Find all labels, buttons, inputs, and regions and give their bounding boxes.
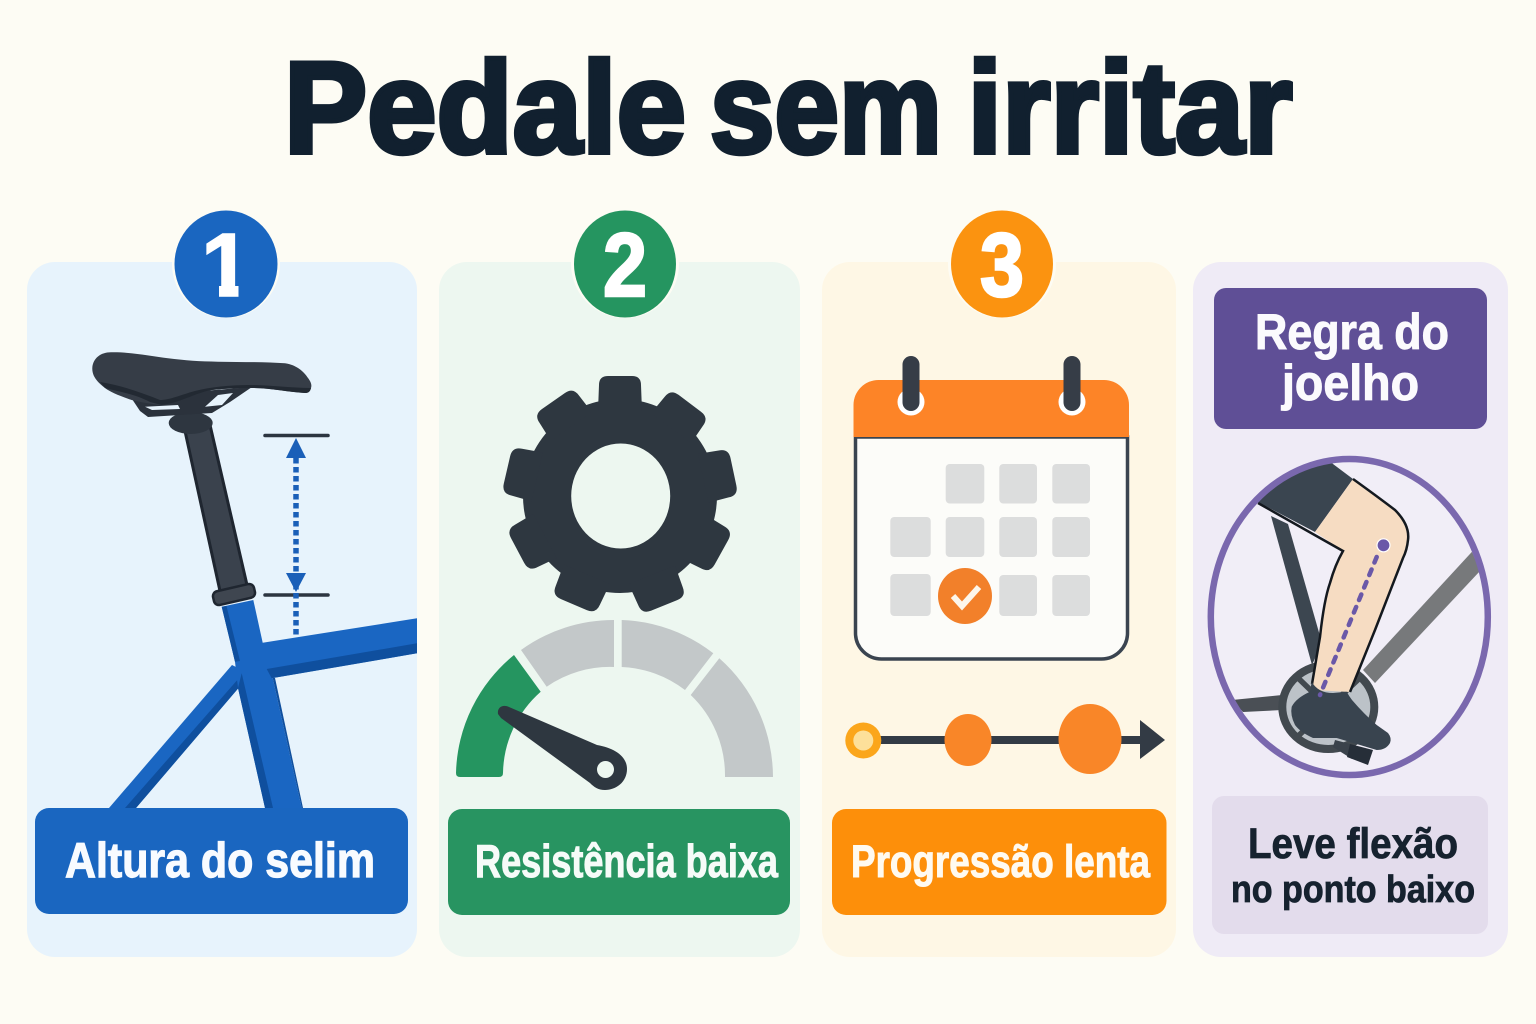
title: sem xyxy=(710,34,942,180)
shoe xyxy=(1291,682,1391,750)
leg xyxy=(1312,479,1408,692)
leg outline xyxy=(1258,479,1408,692)
badge: number 1: 1 xyxy=(201,216,251,316)
note text xyxy=(1231,820,1475,911)
label text: progressao lenta: Progressão lenta xyxy=(851,836,1151,887)
dashed knee line xyxy=(1320,557,1377,695)
icon: saddle xyxy=(92,352,311,417)
panel background purple xyxy=(1193,262,1508,957)
badge: number 2 xyxy=(571,210,679,318)
panel: progressao lenta xyxy=(822,262,1176,957)
needle hub hole xyxy=(597,761,614,778)
panel background orange xyxy=(822,262,1176,957)
heading text xyxy=(1255,304,1449,411)
panel: regra do joelho xyxy=(1193,262,1508,957)
icon: gear xyxy=(501,376,739,615)
icon: knee alignment illustration xyxy=(1211,450,1488,775)
badge: number 3 xyxy=(948,210,1056,318)
icon: check mark day xyxy=(938,568,992,624)
label box: progressao lenta xyxy=(832,809,1166,915)
icon: height measure arrows xyxy=(265,436,328,636)
icon: calendar xyxy=(854,356,1129,659)
label box: altura do selim xyxy=(35,808,408,914)
heading text: joelho xyxy=(1281,355,1419,411)
badge: number 1 xyxy=(172,210,280,318)
pedal xyxy=(1333,740,1373,765)
badge: number 2: 2 xyxy=(603,216,647,316)
heading box xyxy=(1214,288,1487,429)
knee dot xyxy=(1377,539,1390,552)
note box xyxy=(1212,796,1488,934)
circle outline xyxy=(1211,459,1488,775)
icon: bicycle frame xyxy=(109,600,417,808)
gauge needle xyxy=(498,706,627,790)
panel background blue xyxy=(27,262,417,957)
note text: no ponto baixo xyxy=(1231,869,1475,911)
icon: seat post xyxy=(169,412,256,606)
label box: resistencia baixa xyxy=(448,809,790,915)
panel: altura do selim xyxy=(27,262,417,957)
label text: altura do selim: Altura do selim xyxy=(65,834,375,888)
label text: resistencia baixa: Resistência baixa xyxy=(475,835,778,887)
panel: resistencia baixa xyxy=(439,262,800,957)
note text: Leve flexão xyxy=(1248,820,1458,868)
title: irritar xyxy=(968,34,1292,180)
gauge: low resistance dial xyxy=(456,620,773,790)
timeline: slow progression arrow xyxy=(845,704,1165,774)
badge: number 3: 3 xyxy=(980,216,1024,316)
title xyxy=(284,34,1292,180)
panel background green xyxy=(439,262,800,957)
title: Pedale xyxy=(284,34,686,180)
heading text: Regra do xyxy=(1255,304,1449,360)
